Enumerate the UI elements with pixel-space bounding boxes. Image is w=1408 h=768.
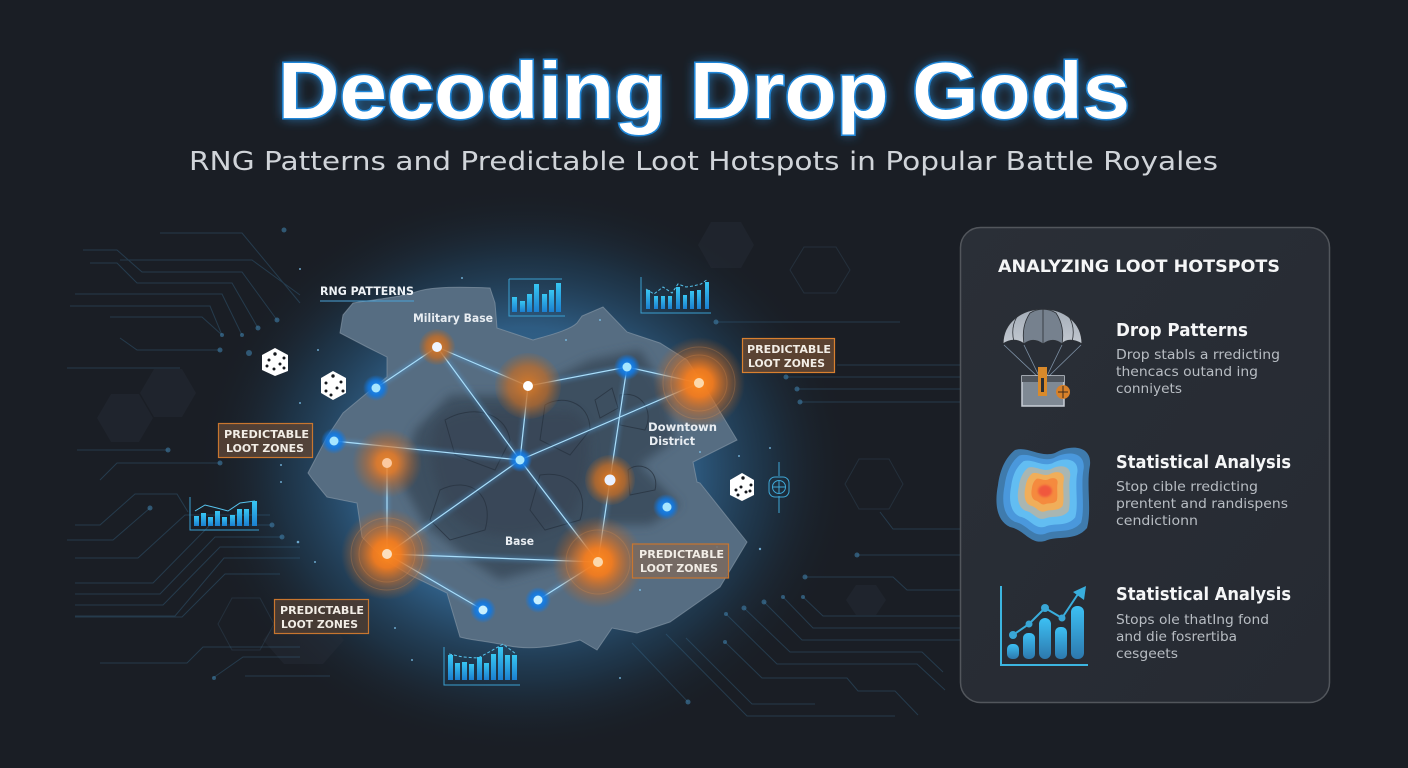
item text: statistical analysis two: Stops ole thatIng fond [1116,612,1269,628]
map contours [430,388,656,540]
mini bar chart: bottom [444,644,520,685]
icon: dice three [730,473,754,501]
callout: predictable loot zones, south: LOOT ZONES [640,562,718,575]
panel: analyzing loot hotspots [960,228,1330,702]
network links core [334,347,699,610]
callout: predictable loot zones, north east [742,338,834,372]
hexagon pattern [97,222,886,664]
item heading: statistical analysis one: Statistical Analysis [1116,452,1291,473]
item text: drop patterns [1116,347,1280,397]
mini bar chart: top right [641,277,711,313]
mini bar chart: top center [509,279,565,316]
label: RNG patterns: RNG PATTERNS [320,284,414,298]
callout: predictable loot zones, south west: PREDICTABLE [280,604,364,617]
circuit traces right [632,322,960,716]
callout: predictable loot zones, south west [274,600,368,634]
label: Military Base: Military Base [413,311,493,325]
item text: drop patterns: thencacs outand ing [1116,364,1258,380]
hexagon outlines [218,247,903,650]
item text: drop patterns: Drop stabls a rredicting [1116,347,1280,363]
icon: target crosshair [769,462,789,513]
sparkle particles [280,268,771,679]
callout: predictable loot zones, west: PREDICTABLE [224,428,309,441]
subtitle: RNG Patterns and Predictable Loot Hotspots in Popular Battle Royales [189,147,1218,177]
item text: statistical analysis two [1116,612,1269,662]
hotspot: center south [585,455,635,505]
blue nodes [321,354,679,623]
label: Downtown District: Downtown [648,420,717,434]
network links [334,347,699,610]
mini bar chart: left [190,497,259,530]
title: Decoding Drop Gods [278,46,1130,135]
label: Downtown District [648,420,717,448]
hotspot: west [352,428,422,498]
hotspot: southwest [341,508,433,600]
map landmass [308,287,747,650]
item heading: statistical analysis two: Statistical Analysis [1116,584,1291,605]
map terrain darker core [431,409,589,536]
circuit traces left [67,233,330,678]
title: Decoding Drop Gods [278,46,1130,135]
circuit nodes right [686,320,860,704]
item text: statistical analysis two: cesgeets [1116,646,1178,662]
icon: dice one [262,348,288,376]
map terrain dark region [400,350,680,580]
callout: predictable loot zones, south: PREDICTABLE [639,548,724,561]
icon: growth chart [1001,586,1088,665]
callout: predictable loot zones, south [632,544,728,578]
icon: dice two [321,371,346,400]
hotspot: south [552,516,644,608]
label: Base: Base [505,534,534,548]
label: Downtown District: District [649,434,695,448]
item text: statistical analysis one: Stop cible rredicting [1116,479,1258,495]
item text: statistical analysis one [1116,479,1288,529]
callout: predictable loot zones, west: LOOT ZONES [226,442,304,455]
callout: predictable loot zones, north east: LOOT ZONES [748,357,825,370]
background glow [195,185,855,755]
panel heading: ANALYZING LOOT HOTSPOTS [998,257,1280,277]
item text: drop patterns: conniyets [1116,381,1182,397]
callout: predictable loot zones, north east: PREDICTABLE [747,343,831,356]
item text: statistical analysis one: cendictionn [1116,513,1198,529]
hotspot: center north [495,353,561,419]
item text: statistical analysis one: prentent and randispens [1116,496,1288,512]
circuit nodes left [148,228,286,680]
callout: predictable loot zones, west [218,424,312,458]
hotspot: downtown [653,337,745,429]
item heading: drop patterns: Drop Patterns [1116,320,1248,341]
icon: heat map [996,448,1090,542]
icon: parachute drop [1003,309,1082,406]
item text: statistical analysis two: and die fosrertiba [1116,629,1237,645]
callout: predictable loot zones, south west: LOOT ZONES [281,618,358,631]
hotspot: military base [419,329,455,365]
